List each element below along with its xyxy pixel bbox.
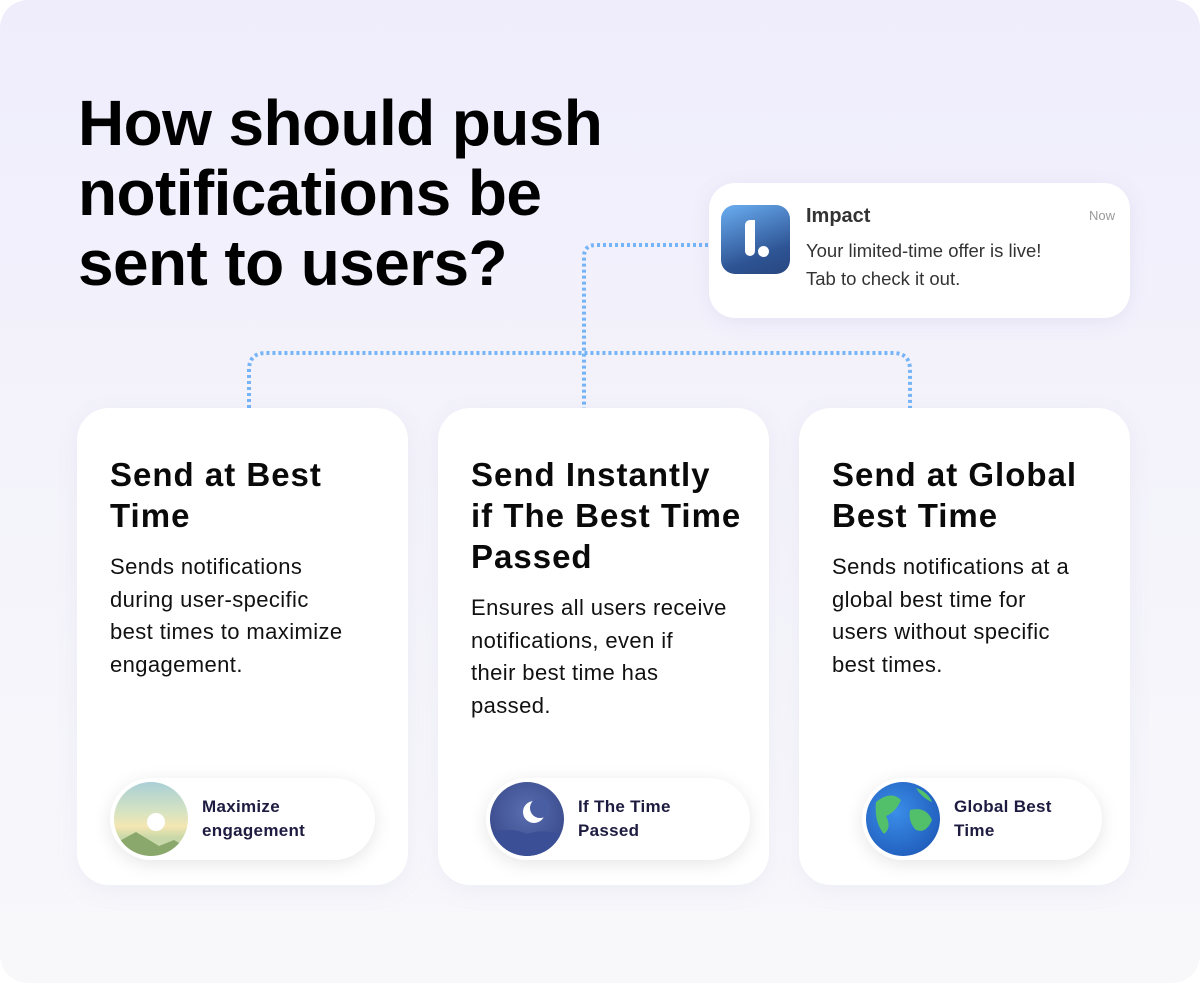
panel: send instantly: notifications, even if <box>471 628 673 652</box>
panel: send at global best time <box>799 408 1130 885</box>
notification text: Impact <box>806 205 870 227</box>
panel: send at best time: Sends notifications <box>110 554 302 579</box>
notification card: Now <box>1089 208 1115 223</box>
pill: maximize engagement <box>110 778 375 860</box>
panel: send instantly: Send Instantly <box>471 456 711 493</box>
panel: send instantly: passed. <box>471 692 551 718</box>
panel: send at best time: during user-specific <box>110 586 309 612</box>
pill: global best time <box>862 778 1102 860</box>
panel: send at global best time: global best time for <box>832 586 1026 612</box>
pill: maximize engagement: engagement <box>202 821 305 840</box>
panel: send at best time: engagement. <box>110 652 243 676</box>
panel: send instantly: Passed <box>471 538 593 575</box>
icon: app logo <box>721 205 790 274</box>
panel: send at best time: Send at Best <box>110 456 322 493</box>
title: notifications be <box>78 157 541 229</box>
pill: global best time: Global Best <box>954 797 1052 816</box>
panel: send at global best time: Sends notifications at a <box>832 554 1069 579</box>
title: sent to users? <box>78 227 507 299</box>
panel: send at global best time: Send at Global <box>832 456 1077 493</box>
panel: send instantly: Ensures all users receive <box>471 595 727 620</box>
panel: send at global best time: users without specific <box>832 619 1050 644</box>
panel: send instantly: if The Best Time <box>471 497 741 534</box>
panel: send at best time <box>77 408 408 885</box>
panel: send instantly: their best time has <box>471 660 658 685</box>
pill: if the time passed: If The Time <box>578 797 671 816</box>
title <box>78 87 602 299</box>
panel: send instantly <box>438 408 769 885</box>
pill: maximize engagement: Maximize <box>202 797 280 816</box>
pill: if the time passed <box>486 778 750 860</box>
panel: send at global best time: best times. <box>832 652 943 676</box>
panel: send at global best time: Best Time <box>832 497 998 534</box>
pill: global best time: Time <box>954 821 995 840</box>
notification card: Your limited-time offer is live! <box>806 240 1041 261</box>
panel: send at best time: Time <box>110 497 190 534</box>
notification card <box>709 183 1130 318</box>
title: How should push <box>78 87 602 159</box>
notification card: Tab to check it out. <box>806 268 960 289</box>
panel: send at best time: best times to maximize <box>110 619 343 644</box>
pill: if the time passed: Passed <box>578 821 639 840</box>
